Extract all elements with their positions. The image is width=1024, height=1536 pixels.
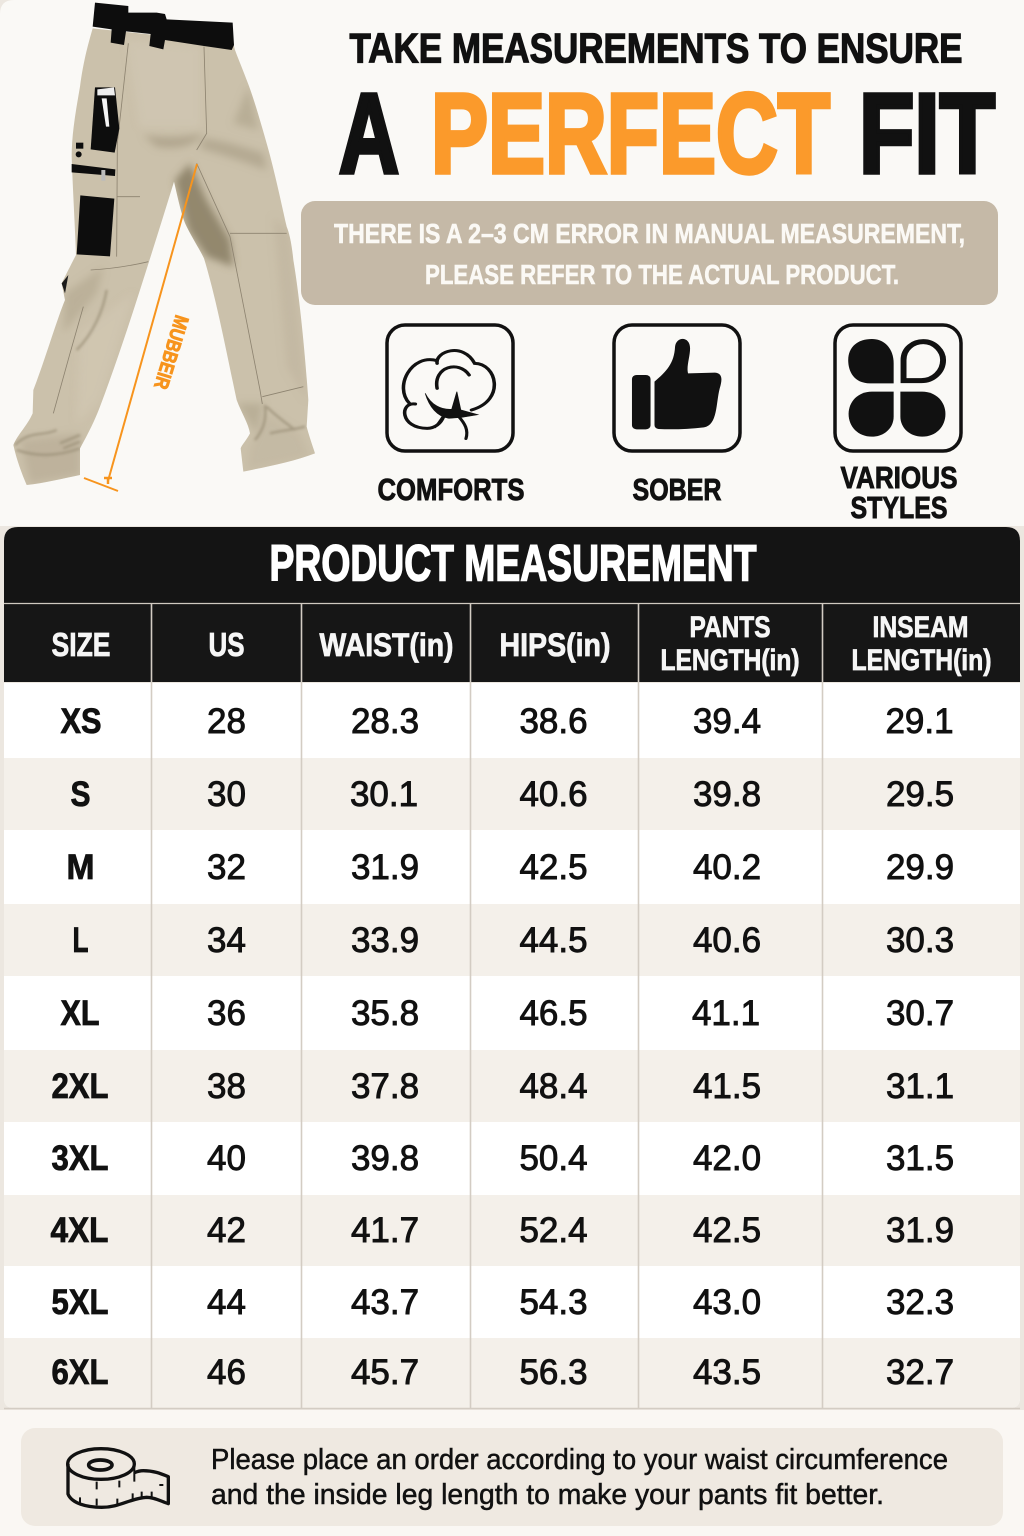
row 2XL — [207, 1067, 954, 1106]
icon: measuring tape — [68, 1449, 168, 1507]
measurement table — [4, 527, 1020, 1408]
row S — [207, 775, 954, 814]
measure label: MUBBEIR — [149, 313, 192, 392]
black upper pocket — [91, 87, 119, 153]
row M: 42.5 — [519, 848, 588, 887]
row 5XL: 32.3 — [886, 1283, 954, 1322]
orange inseam measure line — [84, 164, 197, 491]
row XS — [207, 702, 954, 741]
row M: 32 — [207, 848, 246, 887]
row 3XL — [207, 1139, 954, 1178]
row 4XL: 42.5 — [693, 1211, 761, 1250]
row XL: 30.7 — [886, 994, 954, 1033]
row XS: 39.4 — [693, 702, 761, 741]
row 4XL: 42 — [207, 1211, 246, 1250]
row L: 34 — [207, 921, 246, 960]
icon: comforts cotton — [387, 325, 513, 451]
icon captions: VARIOUS — [840, 460, 958, 495]
row XL: 46.5 — [519, 994, 588, 1033]
size column — [50, 702, 108, 1392]
pants fold lines — [15, 290, 305, 455]
row M — [207, 848, 954, 887]
headline: A — [339, 70, 399, 196]
row XS: 29.1 — [885, 702, 954, 741]
row 3XL: 31.5 — [886, 1139, 954, 1178]
size column: XL — [60, 994, 100, 1033]
row M: 29.9 — [886, 848, 954, 887]
row 6XL — [207, 1353, 954, 1392]
row 2XL: 37.8 — [351, 1067, 419, 1106]
row 6XL: 45.7 — [351, 1353, 419, 1392]
footer text: Please place an order according to your waist circumference — [211, 1444, 948, 1476]
seams — [53, 43, 303, 413]
size column: S — [70, 775, 90, 814]
row 5XL: 43.0 — [693, 1283, 761, 1322]
icon captions — [378, 460, 958, 525]
pants shading — [15, 40, 310, 483]
notice banner: PLEASE REFER TO THE ACTUAL PRODUCT. — [425, 259, 899, 290]
row 6XL: 56.3 — [519, 1353, 588, 1392]
icon captions: COMFORTS — [378, 472, 524, 507]
size column: 3XL — [52, 1139, 108, 1178]
headline: PERFECT — [431, 70, 830, 196]
row S: 29.5 — [886, 775, 954, 814]
size column: L — [72, 921, 88, 960]
size column: M — [66, 848, 94, 887]
row XS: 38.6 — [519, 702, 588, 741]
row 6XL: 32.7 — [886, 1353, 954, 1392]
row 3XL: 42.0 — [693, 1139, 761, 1178]
row 3XL: 50.4 — [519, 1139, 588, 1178]
row M: 40.2 — [693, 848, 761, 887]
row 5XL: 44 — [207, 1283, 246, 1322]
row 6XL: 43.5 — [693, 1353, 761, 1392]
measurement table: LENGTH(in) — [852, 644, 992, 677]
row L: 33.9 — [351, 921, 419, 960]
row 5XL — [207, 1283, 954, 1322]
row 2XL: 41.5 — [693, 1067, 761, 1106]
measurement table: PRODUCT MEASUREMENT — [270, 534, 756, 592]
notice banner — [301, 201, 998, 305]
row S: 30.1 — [350, 775, 418, 814]
table title bar — [4, 527, 1020, 603]
footer note panel — [21, 1428, 1003, 1526]
row L: 44.5 — [519, 921, 588, 960]
row 3XL: 40 — [207, 1139, 246, 1178]
data values — [207, 702, 954, 1392]
measurement table: LENGTH(in) — [660, 644, 800, 677]
size column: 2XL — [52, 1067, 108, 1106]
size column: 6XL — [52, 1353, 108, 1392]
row M: 31.9 — [351, 848, 419, 887]
size column: 4XL — [50, 1211, 108, 1250]
row S: 39.8 — [693, 775, 761, 814]
row S: 30 — [207, 775, 246, 814]
row 2XL: 38 — [207, 1067, 246, 1106]
product photo: khaki cargo pants — [13, 3, 315, 485]
measurement table: INSEAM — [872, 611, 968, 644]
column header row — [4, 604, 1020, 682]
row XL: 41.1 — [692, 994, 760, 1033]
measurement table: US — [208, 626, 244, 663]
measurement table: SIZE — [52, 626, 110, 663]
icon captions: SOBER — [632, 472, 722, 507]
row 2XL: 31.1 — [886, 1067, 954, 1106]
black waistband and belt — [93, 3, 234, 50]
row 2XL: 48.4 — [519, 1067, 588, 1106]
icon: sober thumbs up — [614, 325, 740, 451]
row XL: 35.8 — [351, 994, 419, 1033]
row 4XL: 52.4 — [519, 1211, 588, 1250]
row 4XL: 31.9 — [886, 1211, 954, 1250]
measurement table: PANTS — [690, 611, 770, 644]
row L: 40.6 — [693, 921, 761, 960]
row XS: 28 — [207, 702, 246, 741]
size column: XS — [60, 702, 102, 741]
footer note panel: and the inside leg length to make your pants fit better. — [211, 1479, 884, 1511]
row 4XL — [207, 1211, 954, 1250]
table body rows — [4, 683, 1020, 1408]
row 6XL: 46 — [207, 1353, 246, 1392]
size column: 5XL — [52, 1283, 108, 1322]
row XS: 28.3 — [351, 702, 419, 741]
icon: various styles petals — [835, 325, 961, 451]
row L — [207, 921, 954, 960]
pants body — [13, 28, 315, 485]
headline: FIT — [859, 70, 995, 196]
row 4XL: 41.7 — [351, 1211, 419, 1250]
row 3XL: 39.8 — [351, 1139, 419, 1178]
measurement table: WAIST(in) — [320, 627, 454, 663]
measurement table: HIPS(in) — [500, 627, 610, 663]
row L: 30.3 — [886, 921, 954, 960]
row XL — [207, 994, 954, 1033]
row XL: 36 — [207, 994, 246, 1033]
row S: 40.6 — [519, 775, 588, 814]
black zip strip and buttons — [72, 164, 115, 176]
row 5XL: 54.3 — [519, 1283, 588, 1322]
icon captions: STYLES — [850, 490, 948, 525]
row 5XL: 43.7 — [351, 1283, 419, 1322]
black lower pocket — [77, 195, 114, 256]
